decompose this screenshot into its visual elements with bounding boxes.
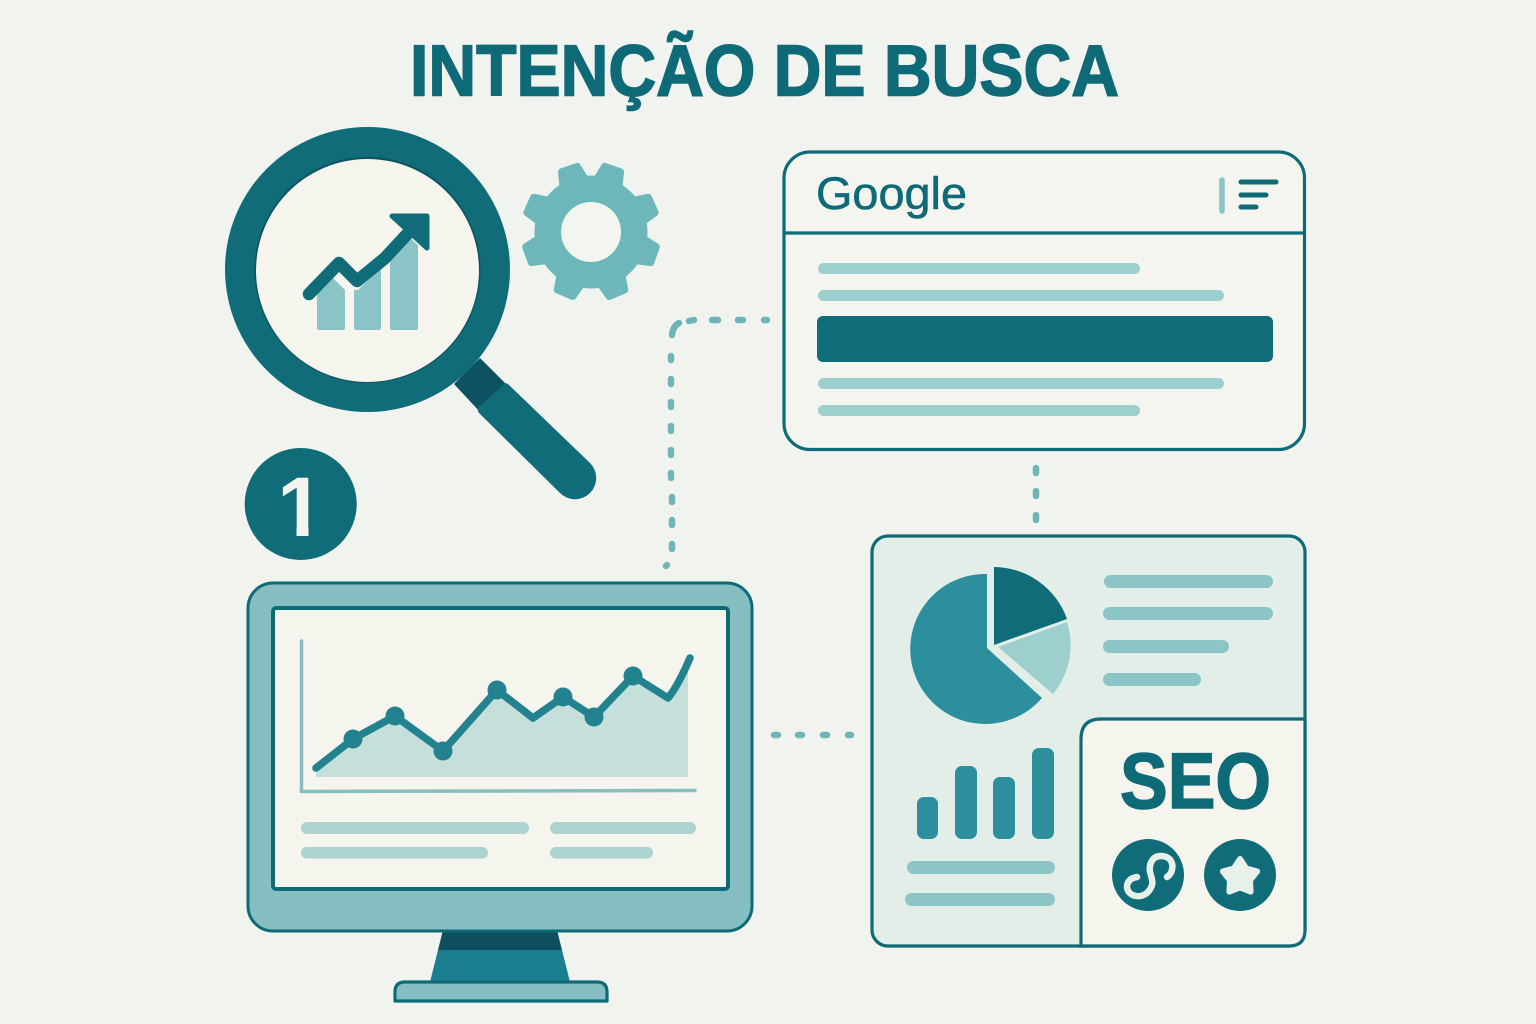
monitor base [395, 982, 607, 1001]
connector: monitor to search results [666, 320, 767, 566]
chart axes [302, 641, 695, 792]
area chart fill [316, 660, 688, 777]
legend lines [1103, 575, 1273, 686]
magnifier handle [478, 383, 596, 499]
monitor stand [430, 930, 570, 982]
icon: menu [1222, 180, 1276, 211]
panel: monitor with line chart [248, 583, 752, 1001]
trend line with markers [316, 658, 690, 768]
number badge [245, 448, 357, 560]
magnifier neck [454, 358, 508, 413]
panel: Google search results [784, 152, 1304, 450]
SEO text: SEO [1120, 736, 1271, 825]
monitor screen [273, 608, 728, 889]
bar chart [917, 748, 1054, 839]
monitor bezel [248, 583, 752, 931]
number badge: 1 [277, 460, 324, 554]
connector: monitor to dashboard [774, 732, 851, 738]
monitor text lines [301, 822, 696, 858]
magnifier lens ring [225, 127, 510, 412]
highlighted search result [817, 316, 1273, 362]
panel: SEO dashboard [872, 536, 1305, 946]
icon: star [1204, 839, 1276, 911]
search result lines [818, 263, 1224, 416]
bar chart caption lines [905, 861, 1055, 906]
icon: gear [525, 166, 657, 297]
icon: magnifying glass with growth chart [225, 127, 596, 499]
title: INTENÇÃO DE BUSCA [410, 30, 1119, 112]
connector: search results to dashboard [1033, 468, 1039, 520]
pie chart [910, 567, 1071, 724]
panel: SEO card [1081, 719, 1305, 946]
growth arrow [309, 216, 427, 294]
icon: link [1112, 839, 1184, 911]
growth bars [317, 238, 418, 330]
Google logo text: Google [816, 168, 967, 219]
